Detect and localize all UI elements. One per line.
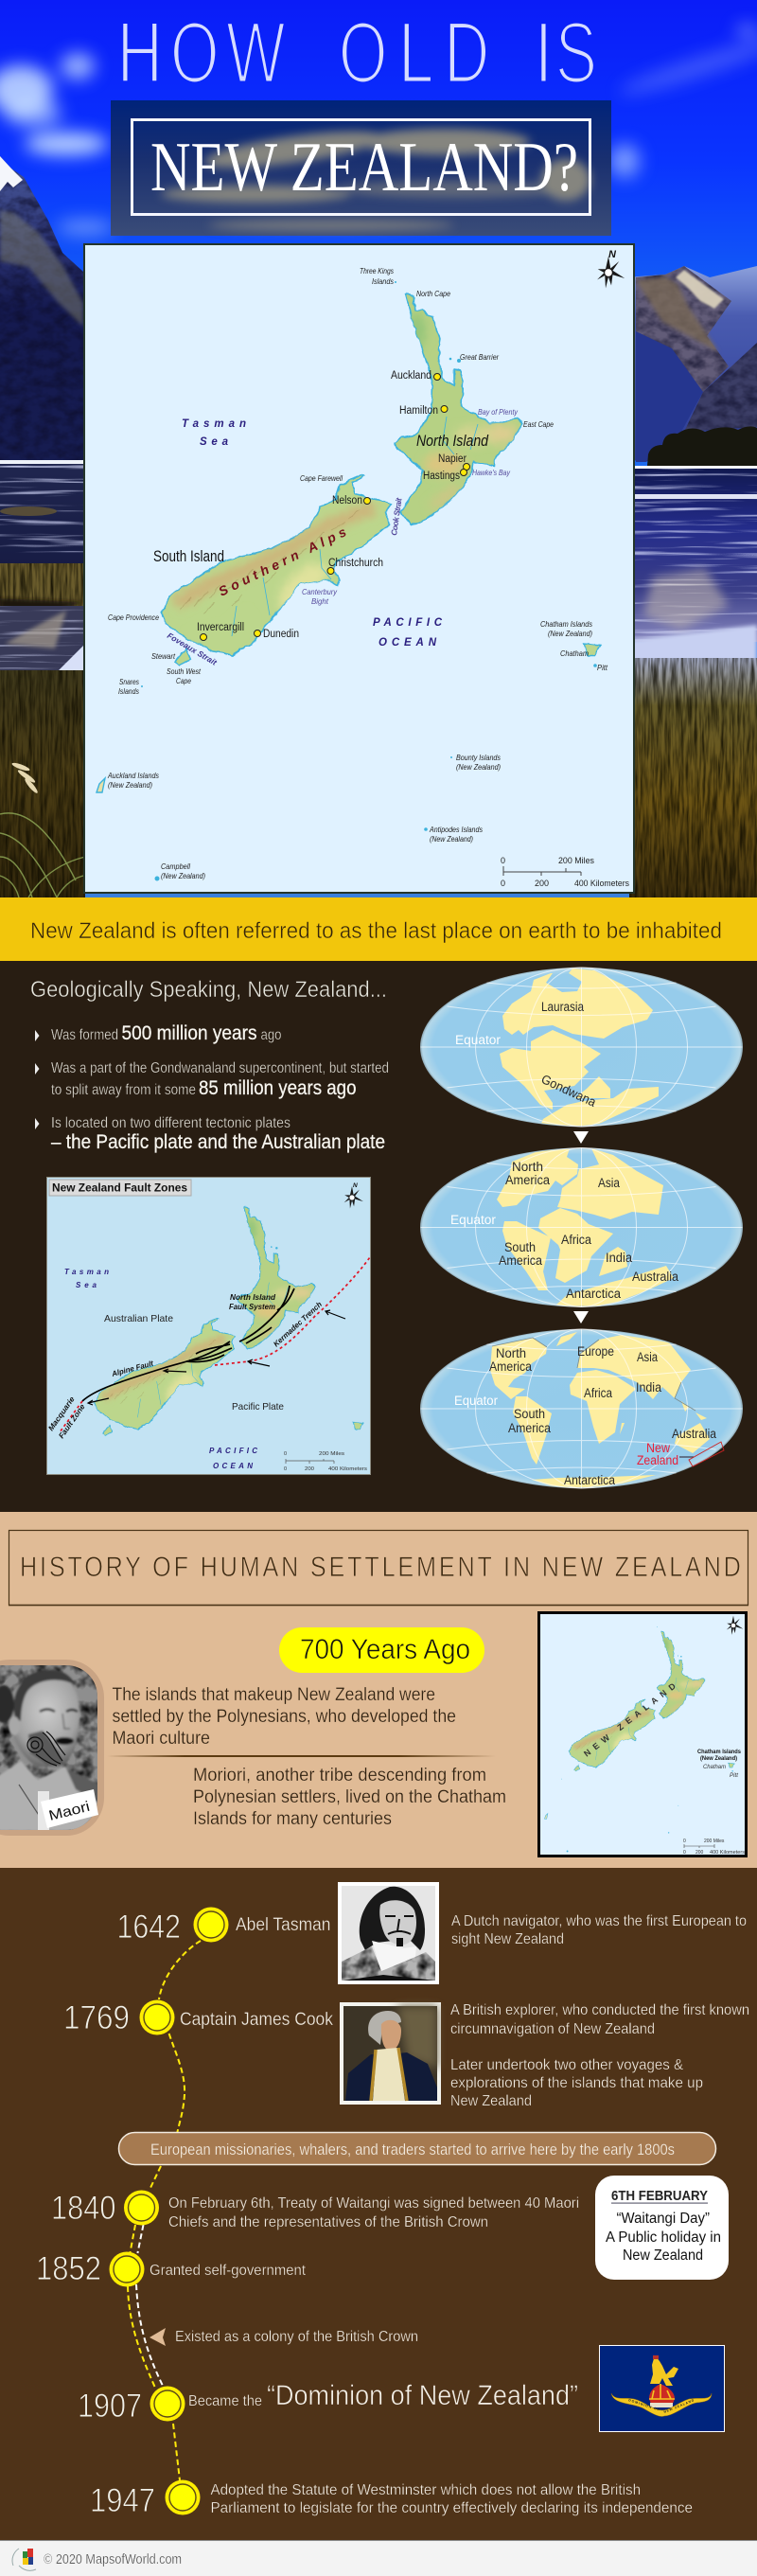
labels: islands, capes and islets: (New Zealand) [430, 834, 473, 844]
labels: islands, capes and islets: (New Zealand) [108, 780, 152, 790]
bullet list of geological facts [35, 1022, 389, 1153]
panel: human settlement background [0, 1512, 757, 1868]
label: Abel Tasman: Abel Tasman [236, 1914, 331, 1935]
arrow: globe one to globe two [573, 1131, 589, 1144]
labels: islands, capes and islets: Cape [176, 676, 191, 685]
labels: islands, capes and islets: East Cape [523, 419, 554, 429]
title: how old is: HOWOLDIS [117, 3, 597, 101]
map scale bar: 0 [501, 856, 505, 865]
map: New Zealand small: 0 [683, 1850, 686, 1856]
labels: islands, capes and islets [107, 266, 608, 880]
title box: new zealand [111, 100, 611, 236]
globe: present day continents with New Zealand: New [646, 1441, 670, 1455]
arrow: globe two to globe three [573, 1311, 589, 1324]
fault map labels: Alpine Fault [110, 1359, 154, 1378]
text: Moriori tribe: Islands for many centuries [193, 1809, 392, 1829]
lion and crown emblem [649, 2355, 678, 2407]
flag: Dominion of New Zealand emblem [600, 2346, 725, 2431]
node 1769 [140, 1999, 174, 2035]
labels: islands, capes and islets: Great Barrier [460, 352, 500, 362]
labels: cities with markers: Napier [438, 453, 467, 465]
map: New Zealand small: 0 [683, 1839, 686, 1844]
heading: history of human settlement [9, 1530, 748, 1606]
text: Treaty of Waitangi: On February 6th, Treaty of Waitangi was signed between 40 Maori [168, 2195, 579, 2212]
map: New Zealand small: Chatham [703, 1764, 727, 1770]
text: colony of the British Crown: Existed as a colony of the British Crown [175, 2329, 418, 2345]
fault map labels: OCEAN [213, 1462, 253, 1470]
text: James Cook description [450, 2002, 749, 2109]
motion arrows [88, 1310, 345, 1405]
labels: seas, bays and straits: Bay of Plenty [478, 407, 519, 417]
globe: present day continents with New Zealand: Asia [637, 1350, 658, 1364]
globe: present day continents with New Zealand: Europe [577, 1344, 614, 1359]
bullet: two tectonic plates [35, 1115, 385, 1153]
panel: geology background [0, 961, 757, 1512]
fault map compass [344, 1182, 363, 1208]
globe: continents drifting: North [512, 1160, 543, 1174]
text: Statute of Westminster: Parliament to legislate for the country effectively declaring its independence [210, 2500, 693, 2516]
labels: seas, bays and straits [166, 407, 519, 667]
fault map labels: Tasman [64, 1268, 109, 1276]
map scale bar: 0 [501, 879, 505, 888]
map: New Zealand small: 200 Miles [704, 1839, 725, 1844]
panel: timeline background [0, 1868, 757, 2540]
labels: island names and mountains: South Island [153, 548, 224, 565]
timeline years [36, 1909, 181, 2519]
fault map scale bar [284, 1451, 367, 1472]
callout: European arrivals: European missionaries, whalers, and traders started to arrive here by the early 1800s [150, 2141, 675, 2159]
callout: Waitangi Day: New Zealand [623, 2247, 703, 2264]
labels: seas, bays and straits: Sea [200, 436, 229, 448]
motto ribbon [611, 2393, 712, 2417]
badge: 700 years ago: 700 Years Ago [300, 1634, 470, 1665]
fault map labels: Fault System [229, 1303, 275, 1311]
callout: European arrivals [119, 2132, 715, 2164]
labels: islands, capes and islets: Snares [119, 677, 140, 686]
labels: seas, bays and straits: Hawke's Bay [472, 468, 511, 477]
globe: present day continents with New Zealand: Africa [584, 1386, 612, 1400]
timeline years: 1642 [117, 1909, 181, 1945]
text: became the Dominion of New Zealand: Became the [188, 2393, 262, 2409]
text: Treaty of Waitangi: Chiefs and the representatives of the British Crown [168, 2214, 488, 2230]
globe: present day continents with New Zealand: Australia [672, 1427, 716, 1441]
fault map scale bar: 400 Kilometers [328, 1466, 367, 1472]
icon: MapsofWorld logo [12, 2549, 36, 2570]
map: New Zealand small: (New Zealand) [700, 1755, 737, 1762]
map: New Zealand small: Chatham Islands [697, 1749, 741, 1755]
timeline years: 1840 [51, 2190, 115, 2227]
globe: present day continents with New Zealand: North [496, 1346, 526, 1360]
globe: continents drifting: South [504, 1240, 536, 1254]
fault map title: New Zealand Fault Zones [52, 1181, 187, 1195]
labels: islands, capes and islets: Campbell [161, 862, 191, 871]
node 1947 [165, 2480, 201, 2514]
globe: present day continents with New Zealand: Zealand [637, 1453, 678, 1467]
globe: present day continents with New Zealand: America [508, 1421, 551, 1435]
fault map labels: PACIFIC [209, 1447, 257, 1455]
labels: island names and mountains: Southern Alps [216, 524, 349, 599]
map: New Zealand small [539, 1613, 746, 1856]
text: James Cook description: circumnavigation of New Zealand [450, 2021, 655, 2037]
plate boundary [60, 1257, 370, 1432]
map land shape [95, 1207, 363, 1435]
labels: islands, capes and islets: Pitt [597, 663, 608, 672]
globe: present day continents with New Zealand: South [514, 1407, 545, 1421]
globe: present day continents with New Zealand [420, 1329, 743, 1490]
title box: new zealand: NEW ZEALAND? [150, 129, 578, 206]
labels: islands, capes and islets: Cape Farewell [300, 473, 343, 483]
label: Maori: Maori [47, 1799, 92, 1824]
fault lines [82, 1286, 294, 1401]
text: James Cook description: Later undertook two other voyages & [450, 2057, 683, 2073]
map: New Zealand small: NEW ZEALAND [582, 1681, 678, 1759]
map scale bar: 400 Kilometers [574, 879, 629, 888]
globe: present day continents with New Zealand: America [489, 1359, 532, 1374]
labels: seas, bays and straits: PACIFIC [373, 617, 443, 629]
text: self-government: Granted self-government [150, 2263, 307, 2279]
fault map labels: North Island [230, 1293, 276, 1302]
heading: geologically speaking: Geologically Speaking, New Zealand... [30, 977, 387, 1003]
labels: seas, bays and straits: Tasman [182, 418, 246, 430]
hero background photo: sky, mountains, lake [0, 0, 757, 897]
labels: cities with markers: Auckland [391, 370, 431, 382]
text: Treaty of Waitangi [168, 2195, 579, 2230]
fault map labels: Macquarie [46, 1395, 77, 1432]
text: Polynesian settlers: The islands that makeup New Zealand were [112, 1685, 435, 1705]
node 1852 [110, 2251, 144, 2287]
fault map labels: Australian Plate [104, 1313, 173, 1324]
bullet: formed 500 million years ago: Was formed [51, 1027, 118, 1043]
labels: islands, capes and islets: (New Zealand) [456, 762, 501, 772]
text: James Cook description: New Zealand [450, 2093, 532, 2109]
globe: continents drifting: America [505, 1173, 550, 1187]
compass rose: N [608, 249, 617, 260]
bullet: two tectonic plates: – the Pacific plate and the Australian plate [51, 1131, 385, 1153]
labels: cities with markers [197, 370, 469, 640]
text: Polynesian settlers [112, 1685, 456, 1749]
bullet: part of Gondwanaland: Was a part of the Gondwanaland supercontinent, but started [51, 1060, 389, 1076]
map: New Zealand small: 200 [695, 1850, 704, 1856]
timeline nodes [110, 1907, 229, 2514]
label: Captain James Cook: Captain James Cook [180, 2009, 333, 2030]
fault map scale bar: 0 [284, 1466, 287, 1472]
labels: islands, capes and islets: South West [167, 666, 202, 676]
footer: © 2020 MapsofWorld.com [44, 2551, 182, 2567]
node 1840 [124, 2191, 159, 2225]
map: New Zealand small: Pitt [730, 1772, 739, 1779]
timeline years: 1852 [36, 2250, 101, 2287]
globe: Pangaea with Laurasia and Gondwana [420, 968, 743, 1128]
labels: islands, capes and islets: Chatham Islands [540, 619, 593, 629]
callout: Waitangi Day: “Waitangi Day” [617, 2211, 710, 2227]
text: Statute of Westminster: Adopted the Statute of Westminster which does not allow the British [210, 2482, 641, 2498]
bullet: part of Gondwanaland [35, 1060, 389, 1099]
globe: present day continents with New Zealand: Antarctica [564, 1473, 615, 1487]
text: James Cook description: explorations of the islands that make up [450, 2075, 703, 2091]
text: became the Dominion of New Zealand: “Dominion of New Zealand” [267, 2380, 578, 2411]
callout: Waitangi Day: A Public holiday in [606, 2230, 721, 2246]
compass rose [597, 249, 625, 288]
portrait: Abel Tasman [338, 1882, 439, 1984]
labels: cities with markers: Hamilton [399, 405, 438, 417]
fault map labels: Sea [76, 1281, 97, 1289]
divider [107, 1755, 496, 1757]
heading: history of human settlement: HISTORY OF HUMAN SETTLEMENT IN NEW ZEALAND [20, 1551, 741, 1582]
fault map labels: Pacific Plate [232, 1401, 284, 1412]
text: Abel Tasman description [451, 1913, 747, 1947]
globe: continents drifting: Antarctica [566, 1287, 621, 1301]
timeline years: 1947 [90, 2482, 155, 2519]
callout: Waitangi Day: 6TH FEBRUARY [611, 2189, 708, 2204]
globe: continents drifting: Equator [450, 1213, 496, 1227]
islands of New Zealand [97, 281, 601, 880]
labels: islands, capes and islets: Auckland Islands [107, 771, 160, 780]
labels: seas, bays and straits: Cook Strait [389, 496, 404, 536]
labels: seas, bays and straits: Canterbury [302, 587, 338, 596]
bullet: part of Gondwanaland: 85 million years ago [199, 1077, 356, 1099]
globe: present day continents with New Zealand: India [636, 1380, 661, 1395]
fault map labels [46, 1268, 324, 1470]
badge: 700 years ago [279, 1627, 484, 1673]
globe: continents drifting: Asia [598, 1176, 620, 1190]
footer [0, 2540, 757, 2576]
labels: seas, bays and straits: OCEAN [378, 637, 437, 648]
callout: Waitangi Day [595, 2176, 729, 2280]
motto ribbon: DOMINION OF [628, 2398, 660, 2411]
labels: islands, capes and islets: (New Zealand) [548, 629, 592, 638]
labels: islands, capes and islets: Antipodes Islands [429, 825, 484, 834]
labels: islands, capes and islets: Cape Providence [108, 613, 159, 622]
text: Moriori tribe: Polynesian settlers, lived on the Chatham [193, 1787, 506, 1807]
globe: Pangaea with Laurasia and Gondwana: Laurasia [541, 1000, 584, 1014]
labels: islands, capes and islets: Islands [118, 686, 140, 696]
labels: islands, capes and islets: Stewart [151, 651, 176, 661]
globe: continents drifting: America [499, 1253, 542, 1268]
fault map compass: N [353, 1182, 358, 1189]
fault map scale bar: 0 [284, 1451, 287, 1457]
globe: continents drifting [420, 1147, 743, 1309]
labels: islands, capes and islets: Chatham [560, 648, 589, 658]
labels: islands, capes and islets: Bounty Islands [456, 753, 502, 762]
map scale bar [501, 856, 629, 888]
labels: cities with markers: Christchurch [328, 558, 383, 569]
globe: continents drifting: Australia [632, 1270, 678, 1284]
map scale bar: 200 Miles [558, 856, 594, 865]
map: New Zealand small: 400 Kilometers [710, 1850, 746, 1856]
globe: continents drifting: Africa [561, 1233, 591, 1247]
timeline years: 1769 [63, 1999, 130, 2036]
fault map labels: Fault Zone [57, 1402, 87, 1440]
text: Moriori tribe [193, 1766, 506, 1829]
arrow: pointer to colony period [150, 2328, 166, 2346]
banner: last place to be inhabited: New Zealand is often referred to as the last place on earth to be inhabited [30, 918, 722, 944]
labels: seas, bays and straits: Bight [311, 596, 329, 606]
map: New Zealand fault zones [46, 1178, 371, 1475]
labels: islands, capes and islets: Three Kings [360, 266, 395, 275]
labels: islands, capes and islets: North Cape [416, 289, 450, 298]
motto ribbon: NEW ZEALAND [663, 2398, 695, 2414]
labels: cities with markers: Nelson [332, 495, 362, 506]
globe: present day continents with New Zealand: Equator [454, 1394, 498, 1408]
labels: cities with markers: Hastings [423, 471, 460, 482]
globe: Pangaea with Laurasia and Gondwana: Gondwana [539, 1072, 599, 1110]
text: Abel Tasman description: sight New Zealand [451, 1931, 564, 1947]
main map of New Zealand [84, 244, 634, 893]
node 1642 [193, 1907, 229, 1943]
bullet: part of Gondwanaland: to split away from it some [51, 1082, 196, 1098]
timeline dashed path [128, 1941, 201, 2480]
bullet: formed 500 million years ago: 500 million years [121, 1022, 257, 1044]
fault map scale bar: 200 Miles [319, 1451, 344, 1457]
bullet: formed 500 million years ago [35, 1022, 282, 1044]
labels: island names and mountains [153, 433, 489, 599]
text: Statute of Westminster [210, 2482, 693, 2516]
labels: island names and mountains: North Island [416, 433, 489, 450]
label: Maori [41, 1789, 98, 1828]
bullet: two tectonic plates: Is located on two different tectonic plates [51, 1115, 290, 1131]
map scale bar: 200 [535, 879, 549, 888]
portrait: Captain James Cook [340, 2002, 441, 2105]
text: Moriori tribe: Moriori, another tribe descending from [193, 1766, 486, 1785]
labels: cities with markers: Invercargill [197, 622, 244, 633]
labels: cities with markers: Dunedin [263, 629, 299, 640]
timeline years: 1907 [78, 2388, 142, 2425]
fault map scale bar: 200 [305, 1466, 314, 1472]
globe: continents drifting: India [606, 1251, 632, 1265]
labels: islands, capes and islets: (New Zealand) [161, 871, 205, 880]
labels: seas, bays and straits: Foveaux Strait [166, 631, 220, 667]
globe: Pangaea with Laurasia and Gondwana: Equator [455, 1033, 501, 1047]
fault map labels: Kermadec Trench [272, 1300, 324, 1348]
labels: islands, capes and islets: Islands [372, 276, 395, 286]
photo: Maori man with facial tattoo [0, 1660, 104, 1836]
node 1907 [150, 2386, 185, 2422]
banner: last place to be inhabited [0, 897, 757, 961]
text: Polynesian settlers: settled by the Polynesians, who developed the [112, 1707, 456, 1727]
text: Polynesian settlers: Maori culture [112, 1729, 210, 1749]
bullet: formed 500 million years ago: ago [261, 1027, 282, 1043]
